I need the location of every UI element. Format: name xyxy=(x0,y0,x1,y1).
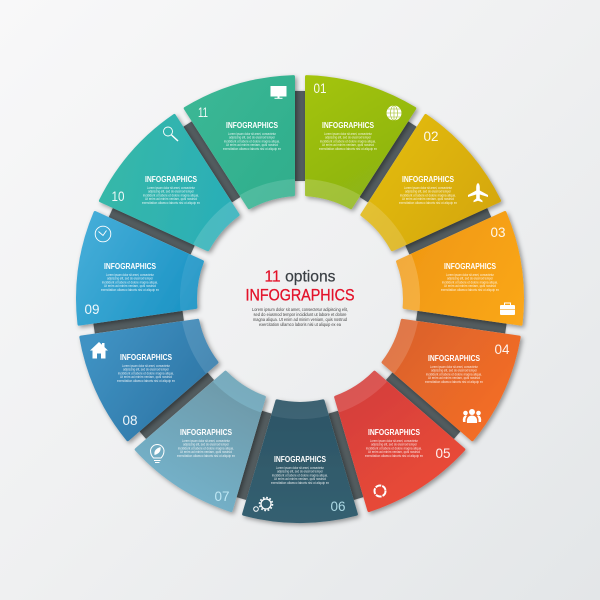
number 07: 07 xyxy=(214,489,230,504)
heading and text 04: exercitation ullamco laboris nisi ut aliquip ex xyxy=(425,380,483,384)
heading and text 07: incididunt ut labore et dolore magna aliqua. xyxy=(178,446,234,450)
heading and text 08: Ut enim ad minim veniam, quis nostrud xyxy=(120,375,172,379)
heading and text 01 xyxy=(319,120,377,151)
heading and text 11: Lorem ipsum dolor sit amet, consectetur xyxy=(228,132,277,136)
number 04: 04 xyxy=(494,342,510,357)
number 01: 01 xyxy=(314,81,326,96)
heading and text 07: adipiscing elit, sed do eiusmod tempor xyxy=(183,443,230,447)
number 06: 06 xyxy=(330,499,346,514)
panel: segment 11 xyxy=(183,70,325,217)
number 02: 02 xyxy=(424,129,438,144)
heading and text 02: INFOGRAPHICS xyxy=(402,174,454,184)
heading and text 08: adipiscing elit, sed do eiusmod tempor xyxy=(123,368,170,372)
heading and text 08 xyxy=(117,352,175,383)
heading and text 01: exercitation ullamco laboris nisi ut aliquip ex xyxy=(319,147,377,151)
heading and text 10: Ut enim ad minim veniam, quis nostrud xyxy=(145,197,197,201)
panel: segment 09 xyxy=(72,212,207,340)
heading and text 03: incididunt ut labore et dolore magna aliqua. xyxy=(442,280,498,284)
heading and text 02: incididunt ut labore et dolore magna aliqua. xyxy=(400,193,456,197)
heading and text 06: exercitation ullamco laboris nisi ut aliquip ex xyxy=(271,481,329,485)
heading and text 05: incididunt ut labore et dolore magna aliqua. xyxy=(366,446,422,450)
heading and text 03: exercitation ullamco laboris nisi ut aliquip ex xyxy=(441,288,499,292)
heading and text 08: exercitation ullamco laboris nisi ut aliquip ex xyxy=(117,379,175,383)
heading and text 01: incididunt ut labore et dolore magna aliqua. xyxy=(320,139,376,143)
heading and text 06: Ut enim ad minim veniam, quis nostrud xyxy=(274,477,326,481)
heading and text 03 xyxy=(441,261,499,292)
heading and text 05 xyxy=(365,427,423,458)
panel: segment 10 xyxy=(95,111,260,275)
heading and text 09 xyxy=(101,261,159,292)
number 05: 05 xyxy=(436,446,450,461)
heading and text 10: Lorem ipsum dolor sit amet, consectetur xyxy=(147,186,196,190)
number 03: 03 xyxy=(490,225,506,240)
heading and text 09: Ut enim ad minim veniam, quis nostrud xyxy=(104,284,156,288)
heading and text 09: Lorem ipsum dolor sit amet, consectetur xyxy=(106,273,155,277)
heading and text 04: Ut enim ad minim veniam, quis nostrud xyxy=(428,376,480,380)
heading and text 06: adipiscing elit, sed do eiusmod tempor xyxy=(277,470,324,474)
heading and text 07 xyxy=(177,427,235,458)
heading and text 10: exercitation ullamco laboris nisi ut aliquip ex xyxy=(142,201,200,205)
heading and text 03: INFOGRAPHICS xyxy=(444,261,496,271)
heading and text 01: Lorem ipsum dolor sit amet, consectetur xyxy=(324,132,373,136)
heading and text 06 xyxy=(271,454,329,485)
heading and text 04: INFOGRAPHICS xyxy=(428,353,480,363)
heading and text 11: exercitation ullamco laboris nisi ut aliquip ex xyxy=(223,147,281,151)
heading and text 01: INFOGRAPHICS xyxy=(322,120,374,130)
heading and text 11 xyxy=(223,120,281,151)
heading and text 09: incididunt ut labore et dolore magna aliqua. xyxy=(102,280,158,284)
center description xyxy=(252,307,348,327)
heading and text 11: incididunt ut labore et dolore magna aliqua. xyxy=(224,139,280,143)
heading and text 04 xyxy=(425,353,483,384)
center description: exercitation ullamco laboris nisi ut aliquip ex ea xyxy=(259,322,341,327)
title: infographics: INFOGRAPHICS xyxy=(246,287,355,305)
heading and text 11: Ut enim ad minim veniam, quis nostrud xyxy=(226,143,278,147)
icon: house xyxy=(90,342,108,358)
heading and text 08: Lorem ipsum dolor sit amet, consectetur xyxy=(122,364,171,368)
heading and text 01: adipiscing elit, sed do eiusmod tempor xyxy=(325,136,372,140)
heading and text 09: adipiscing elit, sed do eiusmod tempor xyxy=(107,277,154,281)
heading and text 03: Ut enim ad minim veniam, quis nostrud xyxy=(444,284,496,288)
heading and text 05: Lorem ipsum dolor sit amet, consectetur xyxy=(370,439,419,443)
heading and text 07: INFOGRAPHICS xyxy=(180,427,232,437)
heading and text 01: Ut enim ad minim veniam, quis nostrud xyxy=(322,143,374,147)
heading and text 05: INFOGRAPHICS xyxy=(368,427,420,437)
heading and text 03: Lorem ipsum dolor sit amet, consectetur xyxy=(446,273,495,277)
heading and text 03: adipiscing elit, sed do eiusmod tempor xyxy=(447,277,494,281)
panel: segment 03 xyxy=(393,212,528,340)
heading and text 02 xyxy=(399,174,457,205)
heading and text 08: incididunt ut labore et dolore magna aliqua. xyxy=(118,371,174,375)
heading and text 04: Lorem ipsum dolor sit amet, consectetur xyxy=(430,365,479,369)
heading and text 02: Lorem ipsum dolor sit amet, consectetur xyxy=(404,186,453,190)
icon: gears xyxy=(254,498,272,511)
icon: magnifier xyxy=(164,127,178,141)
heading and text 11: adipiscing elit, sed do eiusmod tempor xyxy=(229,136,276,140)
panel: segment 07 xyxy=(132,354,292,517)
panel: segment 04 xyxy=(369,290,526,443)
icon: clock xyxy=(95,226,111,242)
panel: segment 01 xyxy=(275,70,417,217)
center title block xyxy=(246,269,355,327)
heading and text 09: exercitation ullamco laboris nisi ut aliquip ex xyxy=(101,288,159,292)
heading and text 07: exercitation ullamco laboris nisi ut aliquip ex xyxy=(177,454,235,458)
heading and text 04: incididunt ut labore et dolore magna aliqua. xyxy=(426,372,482,376)
heading and text 05: exercitation ullamco laboris nisi ut aliquip ex xyxy=(365,454,423,458)
heading and text 02: adipiscing elit, sed do eiusmod tempor xyxy=(405,190,452,194)
heading and text 05: Ut enim ad minim veniam, quis nostrud xyxy=(368,450,420,454)
heading and text 02: exercitation ullamco laboris nisi ut aliquip ex xyxy=(399,201,457,205)
heading and text 08: INFOGRAPHICS xyxy=(120,352,172,362)
heading and text 09: INFOGRAPHICS xyxy=(104,261,156,271)
icon: plane xyxy=(468,183,488,202)
number 08: 08 xyxy=(122,413,138,428)
dark connector bands xyxy=(93,91,507,500)
icon: bulb xyxy=(150,445,164,462)
heading and text 06: Lorem ipsum dolor sit amet, consectetur xyxy=(276,466,325,470)
number 11: 11 xyxy=(198,105,208,120)
heading and text 06: INFOGRAPHICS xyxy=(274,454,326,464)
heading and text 06: incididunt ut labore et dolore magna aliqua. xyxy=(272,473,328,477)
heading and text 10: adipiscing elit, sed do eiusmod tempor xyxy=(148,190,195,194)
heading and text 02: Ut enim ad minim veniam, quis nostrud xyxy=(402,197,454,201)
icon: briefcase xyxy=(500,303,515,315)
center description: magna aliqua. Ut enim ad minim veniam, quis nostrud xyxy=(253,317,347,322)
heading and text 07: Ut enim ad minim veniam, quis nostrud xyxy=(180,450,232,454)
heading and text 10: incididunt ut labore et dolore magna aliqua. xyxy=(143,193,199,197)
heading and text 04: adipiscing elit, sed do eiusmod tempor xyxy=(431,369,478,373)
heading and text 11: INFOGRAPHICS xyxy=(226,120,278,130)
icon: people xyxy=(463,409,481,423)
icon: monitor xyxy=(270,86,286,99)
center description: Lorem ipsum dolor sit amet, consectetur adipiscing elit, xyxy=(252,307,348,312)
title: 11 options: 11 options xyxy=(264,269,336,286)
panel: segment 05 xyxy=(308,354,468,517)
center description: sed do eiusmod tempor incididunt ut labore et dolore xyxy=(254,312,347,317)
heading and text 05: adipiscing elit, sed do eiusmod tempor xyxy=(371,443,418,447)
panel: segment 06 xyxy=(244,401,356,521)
heading and text 07: Lorem ipsum dolor sit amet, consectetur xyxy=(182,439,231,443)
icon: globe xyxy=(386,106,402,120)
heading and text 10 xyxy=(142,174,200,205)
panel: segment 02 xyxy=(340,111,505,275)
number 10: 10 xyxy=(112,189,124,204)
panel: segment 08 xyxy=(74,290,231,443)
number 09: 09 xyxy=(84,302,100,317)
icon: ring xyxy=(374,486,386,496)
heading and text 10: INFOGRAPHICS xyxy=(145,174,197,184)
